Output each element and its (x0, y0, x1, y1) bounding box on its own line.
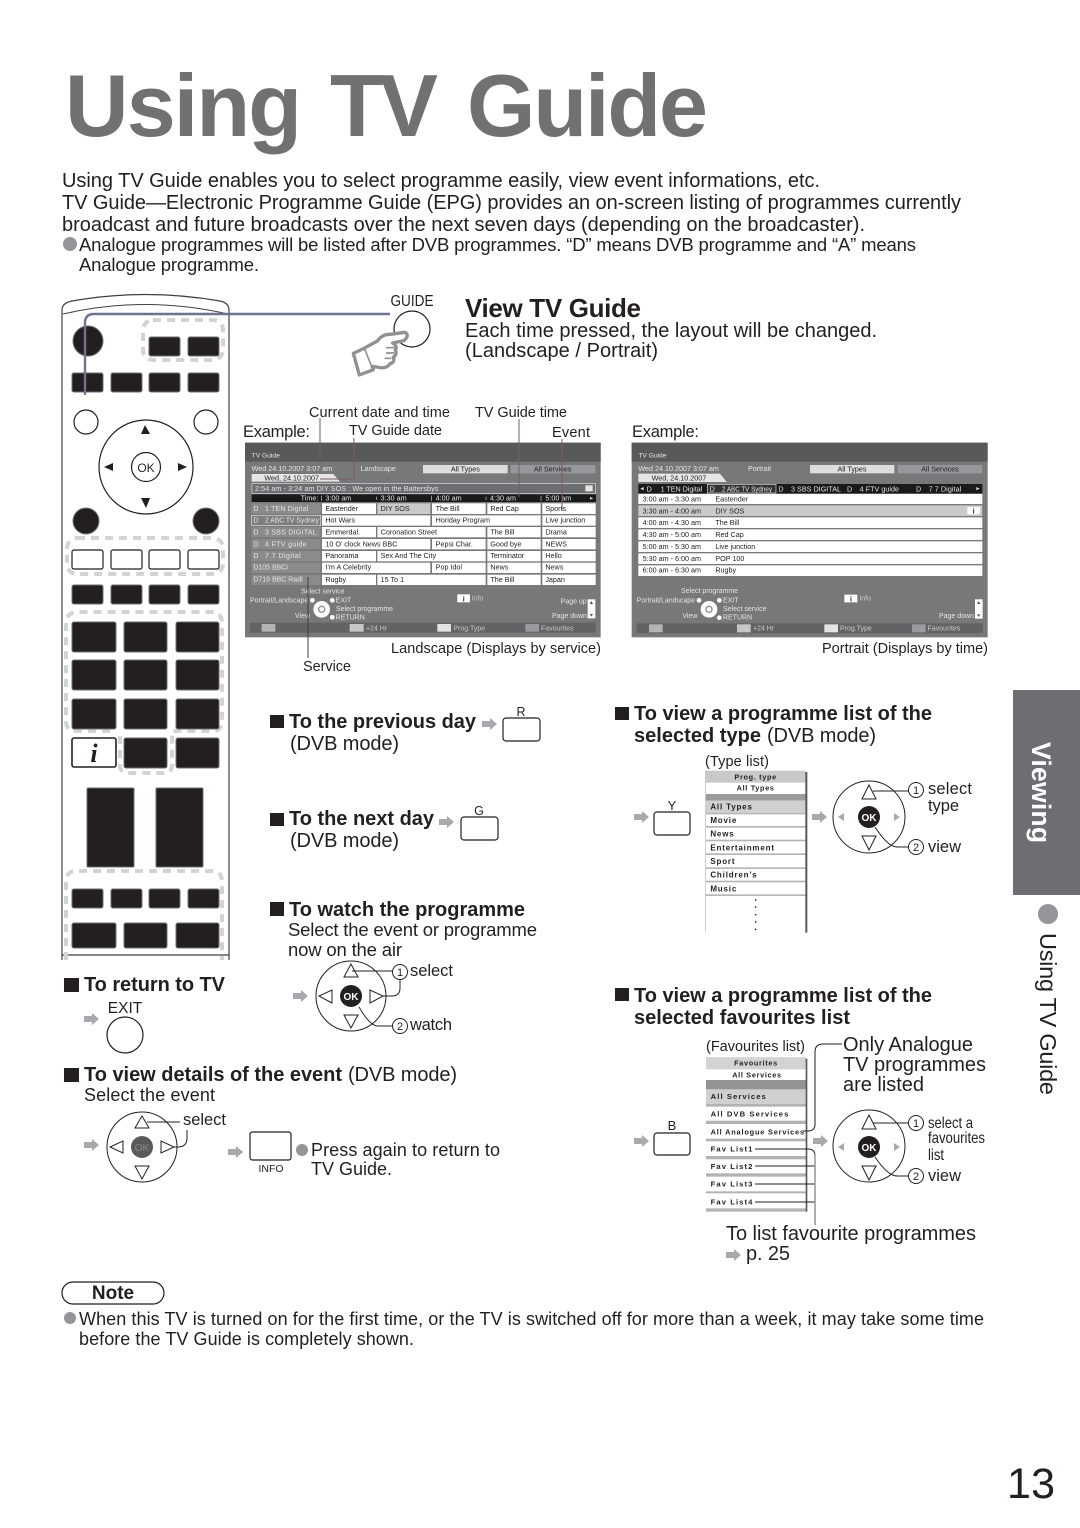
section: to view details of the event: Press again to return to (311, 1140, 500, 1160)
section: programme list by favourites: favourites (928, 1130, 985, 1147)
portrait programme rows: 5:00 am - 5:30 am (643, 542, 701, 551)
icon: pressing hand (353, 332, 407, 375)
type list menu (706, 771, 807, 933)
EPG portrait screen: D (916, 484, 921, 493)
type list menu: News (710, 829, 735, 838)
EPG portrait screen: 4 FTV guide (860, 484, 899, 493)
EPG landscape screen: News (545, 563, 564, 572)
GUIDE button (390, 293, 434, 347)
EPG landscape screen: The Bill (490, 575, 515, 584)
guide footer controls: Info (472, 595, 483, 602)
guide footer controls: RETURN (336, 615, 365, 622)
section: to watch the programme: 2 (397, 1021, 403, 1033)
EPG landscape screen: Sex And The City (381, 551, 436, 560)
EPG landscape screen: Live junction (545, 516, 585, 525)
service column: 3 SBS DIGITAL (265, 529, 317, 536)
portrait footer controls (637, 588, 983, 633)
portrait programme rows: 3:00 am - 3:30 am (643, 494, 701, 503)
service column: 2 ABC TV Sydney (265, 518, 319, 525)
favourites list menu (706, 1057, 807, 1212)
section: programme list by favourites: are listed (843, 1074, 924, 1096)
section: to the next day: (DVB mode) (290, 830, 399, 852)
EPG portrait screen: 1 TEN Digital (661, 484, 703, 493)
favourites list menu: Fav List3 (711, 1180, 753, 1189)
side tab: Viewing: Viewing (1026, 742, 1056, 843)
section: to watch the programme: Select the event or programme (288, 919, 537, 940)
EPG landscape screen: Sports (545, 504, 567, 513)
section: programme list by favourites: selected favourites list (634, 1007, 850, 1029)
section: to the previous day: (DVB mode) (290, 733, 399, 755)
section: to view details of the event: Select the event (84, 1085, 215, 1105)
title: TV (330, 56, 438, 155)
EPG landscape screen: 10 O’ clock News BBC (325, 539, 397, 548)
section: programme list by type: Y (668, 798, 677, 813)
EPG landscape screen: 4:30 am (490, 493, 516, 502)
d-pad: select event (107, 1112, 177, 1182)
title: Guide (467, 56, 708, 155)
intro text (62, 170, 961, 275)
section: programme list by favourites: To list favourite programmes (726, 1223, 976, 1245)
service column: 4 FTV guide (265, 541, 307, 548)
remote control: i (90, 739, 98, 768)
type list menu: Prog. type (734, 772, 777, 781)
favourites list menu: Fav List4 (711, 1197, 753, 1206)
portrait footer controls: Prog.Type (840, 625, 872, 632)
callouts: landscape screen labels and leader lines: Service (303, 659, 351, 675)
callouts: portrait screen labels: Portrait (Displays by time) (822, 641, 988, 657)
EPG landscape screen: 2:54 am - 3:24 am DIY SOS : We open in the Battersbys (255, 484, 439, 493)
EPG landscape screen: TV Guide (252, 453, 280, 460)
section: programme list by favourites: 2 (913, 1171, 919, 1183)
section: to watch the programme (270, 899, 537, 1034)
section: programme list by type: selected type (634, 725, 761, 747)
section: programme list by type: select (928, 780, 972, 798)
favourites list menu: All Analogue Services (711, 1127, 805, 1136)
callouts: landscape screen labels and leader lines: TV Guide date (349, 423, 442, 439)
portrait footer controls: Select service (723, 606, 767, 613)
EPG landscape screen: Coronation Street (381, 527, 437, 536)
section: programme list by favourites: To view a programme list of the (634, 985, 932, 1007)
portrait footer controls: i (850, 597, 852, 604)
portrait programme rows: 5:30 am - 6:00 am (643, 554, 701, 563)
connector line: GUIDE button to remote (85, 314, 390, 395)
EPG landscape screen: Time: (301, 493, 318, 502)
type list menu: Children’s (710, 871, 757, 880)
EPG landscape screen: Hot Wars (325, 516, 355, 525)
GUIDE button: GUIDE (390, 293, 434, 310)
note: Note (92, 1283, 134, 1304)
service column: D (253, 553, 258, 560)
service column: 1 TEN Digital (265, 506, 309, 513)
portrait programme rows: 4:00 am - 4:30 am (643, 518, 701, 527)
portrait programme rows (638, 494, 982, 576)
section: programme list by type: (Type list) (705, 754, 769, 770)
portrait programme rows: Red Cap (715, 530, 744, 539)
EPG landscape screen: The Bill (436, 504, 460, 513)
guide footer controls: Portrait/Landscape (250, 597, 308, 604)
EPG landscape screen: Horiday Program (436, 516, 490, 525)
section: programme list by favourites (615, 985, 986, 1265)
section: to watch the programme: now on the air (288, 939, 402, 960)
EPG landscape screen: Landscape (361, 464, 396, 473)
EPG portrait screen: D (647, 484, 652, 493)
EPG landscape screen: Good bye (490, 539, 522, 548)
section: to watch the programme: OK (344, 992, 359, 1003)
EPG landscape screen: The Bill (490, 527, 515, 536)
guide footer controls: Prog.Type (453, 625, 485, 632)
portrait footer controls: EXIT (723, 598, 739, 605)
type list menu: All Types (710, 803, 753, 812)
portrait footer controls: Page down (939, 613, 974, 620)
intro text: Analogue programme. (79, 254, 259, 275)
d-pad: favourites (833, 1110, 905, 1182)
guide footer controls: Page up (561, 599, 587, 606)
EPG landscape screen: DIY SOS (381, 504, 410, 513)
service column: D (253, 541, 258, 548)
remote control: OK (137, 461, 155, 475)
callouts: portrait screen labels (632, 423, 988, 657)
section: to the next day: To the next day (289, 808, 435, 830)
EPG portrait screen: All Types (837, 465, 867, 474)
EPG landscape screen: Eastender (325, 504, 359, 513)
portrait programme rows: Rugby (715, 566, 737, 575)
service column: 7 7 Digital (265, 553, 301, 560)
type list menu: Sport (710, 857, 735, 866)
EPG landscape screen: 3:30 am (381, 493, 407, 502)
EPG portrait screen: All Services (921, 465, 959, 474)
leader lines from the favourites list (803, 1044, 842, 1131)
service column (252, 503, 321, 585)
service column: D (253, 506, 258, 513)
side label: Using TV Guide: Using TV Guide (1035, 933, 1061, 1095)
EPG landscape screen: Pop Idol (436, 563, 462, 572)
portrait programme rows: 4:30 am - 5:00 am (643, 530, 701, 539)
section: programme list by favourites: select a (928, 1115, 973, 1132)
EPG landscape screen: Wed 24.10.2007 3:07 am (252, 464, 332, 473)
d-pad: watch (316, 961, 386, 1031)
guide footer controls: Select service (301, 588, 345, 595)
favourites list menu: Fav List2 (711, 1162, 753, 1171)
type list menu: All Types (737, 784, 775, 793)
section: programme list by favourites: 1 (913, 1118, 919, 1130)
heading: View TV Guide: (Landscape / Portrait) (465, 340, 658, 362)
EPG landscape screen: Pepsi Char. (436, 539, 473, 548)
section: programme list by favourites: view (928, 1167, 961, 1185)
section: programme list by favourites: (Favourites list) (706, 1039, 805, 1055)
section: programme list by favourites: TV programmes (843, 1054, 986, 1076)
section: programme list by favourites: Only Analogue (843, 1034, 973, 1056)
remote control (62, 294, 229, 960)
guide footer controls (250, 588, 596, 633)
section: to watch the programme: select (410, 962, 453, 980)
section: programme list by type: 1 (913, 785, 919, 797)
portrait programme rows: The Bill (715, 518, 740, 527)
EPG landscape screen: NEWS (545, 539, 567, 548)
EPG portrait screen: D (847, 484, 852, 493)
EPG portrait screen: TV Guide (638, 453, 667, 460)
portrait footer controls: RETURN (723, 615, 752, 622)
section: programme list by type: (DVB mode) (767, 725, 876, 747)
callouts: landscape screen labels and leader lines: Current date and time (309, 405, 450, 421)
portrait footer controls: View (682, 613, 698, 620)
portrait programme rows: 6:00 am - 6:30 am (643, 566, 701, 575)
EPG portrait screen: 7 7 Digital (929, 484, 962, 493)
intro text: Analogue programmes will be listed after DVB programmes. “D” means DVB programme and “A” means (79, 234, 916, 255)
favourites list menu: All Services (732, 1070, 782, 1079)
EPG portrait screen: 2 ABC TV Sydney (722, 484, 772, 493)
section: programme list by favourites: OK (862, 1143, 877, 1154)
section: programme list by favourites: p. 25 (746, 1243, 790, 1265)
service column: D (253, 529, 258, 536)
EPG portrait screen (632, 443, 988, 637)
title: Using (65, 56, 302, 155)
favourites list menu: Favourites (734, 1058, 778, 1067)
type list menu: Music (710, 884, 737, 893)
portrait programme rows: Live junction (715, 542, 755, 551)
heading: View TV Guide: View TV Guide (465, 293, 641, 323)
service column: D105 BBCi (253, 565, 288, 572)
portrait footer controls: Info (859, 596, 871, 603)
favourites list menu: Fav List1 (711, 1145, 753, 1154)
section: to return to TV: To return to TV (84, 974, 226, 996)
section: programme list by type: type (928, 797, 959, 815)
EPG landscape screen: 4:00 am (436, 493, 462, 502)
section: programme list by type: view (928, 838, 961, 856)
section: to return to TV (64, 974, 226, 1053)
section: programme list by type: 2 (913, 842, 919, 854)
heading: View TV Guide (465, 293, 877, 362)
EPG landscape screen: Rugby (325, 575, 347, 584)
portrait programme rows: 3:30 am - 4:00 am (643, 506, 701, 515)
EPG landscape screen: Terminator (490, 551, 525, 560)
EPG landscape screen: Drama (545, 527, 567, 536)
section: to the previous day: R (516, 705, 526, 719)
guide footer controls: View (295, 613, 311, 620)
section: programme list by type: To view a programme list of the (634, 703, 932, 725)
note: before the TV Guide is completely shown. (79, 1329, 414, 1349)
guide footer controls: EXIT (336, 598, 352, 605)
intro text: broadcast and future broadcasts over the next seven days (depending on the broadcaster). (62, 214, 865, 236)
page number: 13 (1007, 1460, 1055, 1508)
EPG landscape screen: 3:00 am (325, 493, 351, 502)
EPG landscape screen: News (490, 563, 509, 572)
callouts: landscape screen labels and leader lines: TV Guide time (475, 405, 567, 421)
guide footer controls: +24 Hr (366, 625, 388, 632)
service column: D719 BBC Radi (253, 577, 303, 584)
section: to watch the programme: To watch the programme (289, 899, 525, 921)
favourites list menu: All Services (711, 1092, 767, 1101)
favourites list menu: All DVB Services (711, 1109, 789, 1118)
section: to return to TV: EXIT (108, 1000, 143, 1017)
EPG landscape screen: Japan (545, 575, 565, 584)
section: programme list by type: OK (862, 813, 877, 824)
guide footer controls: i (463, 596, 465, 603)
callouts: landscape screen labels and leader lines: Landscape (Displays by service) (391, 641, 601, 657)
intro text: Using TV Guide enables you to select programme easily, view event informations, etc. (62, 170, 820, 192)
section: to view details of the event (64, 1064, 500, 1182)
section: to view details of the event: (DVB mode) (348, 1064, 457, 1086)
EPG landscape screen: Red Cap (490, 504, 519, 513)
programme grid (322, 503, 596, 585)
EPG landscape screen: Wed, 24.10.2007 (264, 473, 319, 482)
section: to the previous day (270, 705, 540, 755)
section: programme list by favourites: list (928, 1147, 944, 1164)
service column: D (253, 518, 258, 525)
EPG portrait screen: Portrait (748, 464, 771, 473)
type list menu: Entertainment (710, 843, 775, 852)
EPG landscape screen: Hello (545, 551, 562, 560)
note (62, 1282, 984, 1349)
title (65, 56, 708, 155)
guide footer controls: Page down (552, 613, 587, 620)
portrait footer controls: Select programme (681, 588, 738, 595)
EPG landscape screen: All Types (451, 465, 480, 474)
portrait footer controls: Favourites (928, 625, 961, 632)
EPG portrait screen: D (778, 484, 784, 493)
callouts: landscape screen labels and leader lines: Example: (243, 423, 310, 441)
EPG landscape screen: I’m A Celebrity (325, 563, 372, 572)
portrait footer controls: +24 Hr (753, 625, 775, 632)
heading: View TV Guide: Each time pressed, the layout will be changed. (465, 320, 877, 342)
section: to watch the programme: 1 (397, 967, 403, 979)
EPG portrait screen: 3 SBS DIGITAL (791, 484, 841, 493)
callouts: landscape screen labels and leader lines: Event (552, 425, 590, 441)
guide footer controls: Select programme (336, 606, 393, 613)
section: to the previous day: To the previous day (289, 711, 477, 733)
section: programme list by type (615, 703, 972, 933)
section: to view details of the event: TV Guide. (311, 1159, 392, 1179)
callouts: portrait screen labels: Example: (632, 423, 699, 441)
callouts: landscape screen labels and leader lines (243, 405, 601, 675)
EPG landscape screen: Panorama (325, 551, 359, 560)
portrait footer controls: Portrait/Landscape (637, 598, 695, 605)
intro text: TV Guide—Electronic Programme Guide (EPG) provides an on-screen listing of programmes currently (62, 192, 961, 214)
note: When this TV is turned on for the first time, or the TV is switched off for more than a week, it may take some time (79, 1309, 984, 1329)
section: to the next day: G (474, 804, 484, 818)
EPG portrait screen: D (710, 484, 715, 493)
section: to view details of the event: OK (135, 1143, 150, 1154)
section: to watch the programme: watch (409, 1016, 452, 1034)
portrait programme rows: POP 100 (715, 554, 744, 563)
guide footer controls: Favourites (541, 625, 574, 632)
EPG portrait screen: Wed, 24.10.2007 (652, 474, 706, 483)
portrait programme rows: Eastender (715, 494, 749, 503)
d-pad: type (833, 781, 905, 853)
section: programme list by favourites: B (668, 1118, 676, 1133)
EPG landscape screen (245, 443, 601, 637)
EPG landscape screen: Emmerdal. (325, 527, 360, 536)
section: to view details of the event: To view details of the event (84, 1064, 342, 1086)
side tab: Viewing (1013, 690, 1080, 895)
EPG landscape screen: All Services (534, 465, 572, 474)
section: to view details of the event: select (183, 1111, 226, 1129)
EPG portrait screen: Wed 24.10.2007 3:07 am (638, 464, 719, 473)
portrait programme rows: i (973, 507, 975, 516)
EPG landscape screen: 15 To 1 (381, 575, 404, 584)
EPG landscape screen: 5:00 am (545, 493, 571, 502)
section: to view details of the event: INFO (258, 1163, 284, 1175)
type list menu: Movie (710, 816, 737, 825)
portrait programme rows: DIY SOS (715, 506, 745, 515)
section: to the next day (270, 804, 498, 852)
